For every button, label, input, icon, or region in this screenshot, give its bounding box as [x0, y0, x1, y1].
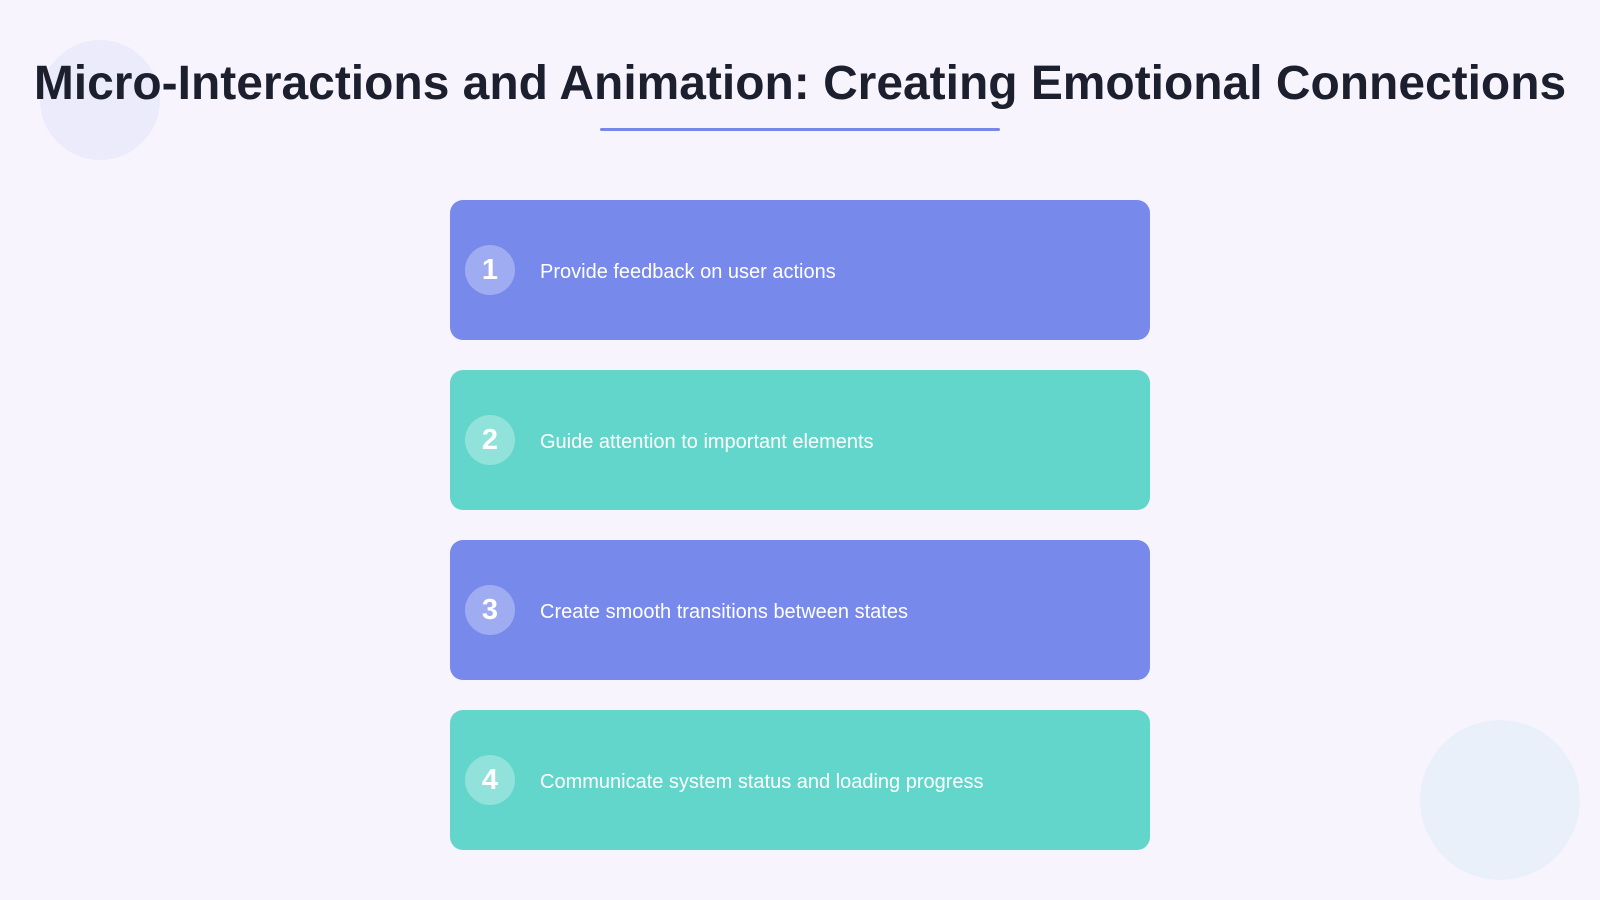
- text 1: Provide feedback on user actions: [540, 261, 836, 283]
- card 1: [450, 200, 1150, 340]
- number 3: [465, 585, 515, 635]
- decorative circle top-left: [40, 40, 160, 160]
- number 2: [465, 415, 515, 465]
- title: Micro-Interactions and Animation: Creating Emotional Connections: [34, 57, 1566, 110]
- text 3: Create smooth transitions between states: [540, 601, 908, 623]
- number 1: [465, 245, 515, 295]
- text 2: Guide attention to important elements: [540, 431, 874, 453]
- number 2: 2: [482, 424, 498, 456]
- card 4: [450, 710, 1150, 850]
- card 2: [450, 370, 1150, 510]
- number 4: [465, 755, 515, 805]
- decorative circle bottom-right: [1420, 720, 1580, 880]
- text 4: Communicate system status and loading progress: [540, 771, 984, 793]
- card 3: [450, 540, 1150, 680]
- number 3: 3: [482, 594, 498, 626]
- number 4: 4: [482, 764, 498, 796]
- title underline: [600, 128, 1000, 131]
- number 1: 1: [482, 254, 498, 286]
